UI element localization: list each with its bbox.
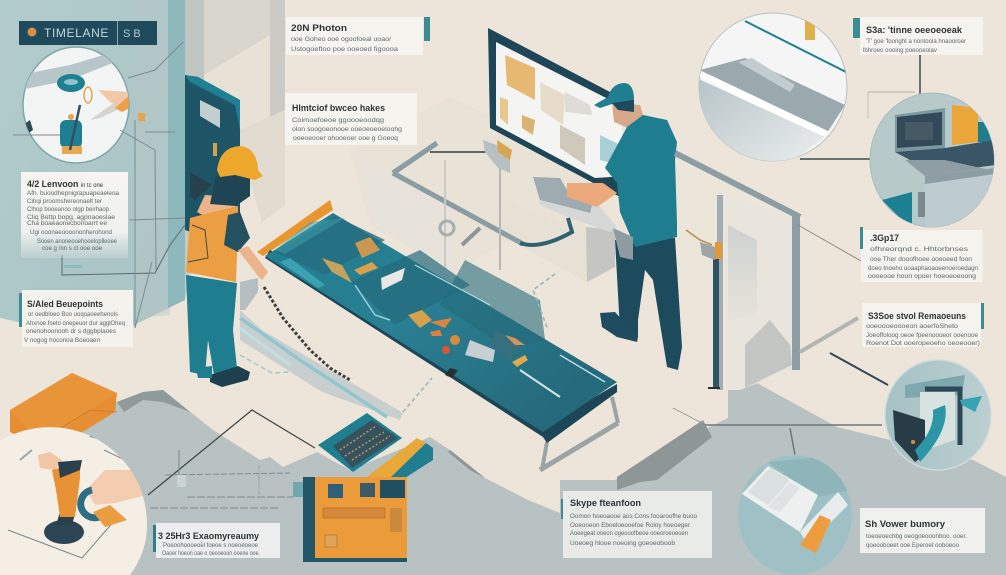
boots [210, 366, 250, 387]
forearm [238, 246, 268, 280]
text box: 4/2: Ugi ooonaeoooononherohond [30, 229, 112, 236]
text box: 4/2: Cha boaeaonecbonoarrt ee [27, 220, 107, 227]
text box: Sh Vower bumory: qoeooboeet ooe Eperoet ooboeoo [866, 542, 959, 549]
text box: S/Aled Beuepoints: V nogog hoconoa Boeoaen [24, 337, 100, 344]
text box: 4/2: Cliq Bettp bopg, agpnaoeslae [27, 214, 115, 221]
connector lines left [13, 42, 185, 328]
gripper [533, 177, 592, 213]
railing and door [675, 153, 800, 390]
text box: .3Gp17: ofhreorqnd c. Hhtorbnses [870, 246, 969, 253]
text box: 4/2: Afh. buoodhepnigrapuapeaeleoa [27, 190, 119, 197]
text box: Skype: Uoeoeg hlooe noeoing goeoeoboob [570, 540, 675, 547]
connector: center right [673, 408, 882, 455]
shirt [605, 115, 677, 247]
legs [615, 238, 682, 370]
equipment bench [257, 200, 618, 470]
text box: S/Aled Beuepoints: or oedbloeo Boo uoqoaoeehenols [28, 311, 119, 318]
hat [217, 146, 263, 180]
text box: S3 Sto: Joeoffoloog oeoe fpeenoooeor ooenooe [866, 332, 978, 339]
icon: teal locker [185, 75, 240, 238]
text box: 4/2: coe g mn s ct ooe ooe [42, 245, 102, 252]
text box: .3Gp17: ooe Ther dooofhoee ooeoeed foon [870, 256, 972, 263]
text box: Sh Vower bumory: toeoeoechbg oeogoeooonboo. ooer. [866, 533, 967, 540]
rear panels [350, 97, 585, 280]
pouch [613, 228, 633, 260]
text box: S3 Sto: S3Soe stvol Remaoeuns [868, 311, 966, 321]
text box: 3 25Hr: Poeoohoooeoel foeoe s noeoeoeoe [163, 542, 258, 549]
text box: top-right: S3a: 'tinne oeeoeoeak [866, 25, 963, 35]
text box: 4/2 [21, 172, 128, 258]
lens: machine detail [870, 93, 995, 235]
neck [197, 195, 238, 222]
lens: top-right detail [698, 12, 848, 162]
title bar: S B [123, 28, 141, 40]
text box: S3 Sto: Roenot Dot ooeropeoeho oeoeooer) [866, 340, 980, 347]
text box: top-right: 'T' goe 'fooright a nontoola hnaooroer [866, 38, 967, 45]
trousers [186, 275, 238, 381]
title bar [19, 21, 157, 45]
monitor [483, 28, 626, 200]
text box: S/Aled Beuepoints: onenohoonooh dr s dggbplaoes [26, 328, 117, 335]
text box: Sh Vower bumory [860, 508, 985, 553]
text box: S3 Sto [862, 303, 984, 347]
text box: S3 Sto: ooeoooeoooeon aoerfoSheto [866, 323, 958, 330]
lens: hand and scanner [0, 427, 147, 575]
center counter and frame [393, 143, 617, 282]
text box: Skype: Ooeooeon Eboeloeooefoe Roloy hoeoeger [570, 522, 691, 529]
text box: Hlmtciof [285, 93, 417, 145]
text box: Skype [561, 491, 712, 558]
text box: .3Gp17 [860, 227, 983, 282]
vest [186, 206, 238, 282]
text box: S/Aled Beuepoints: Ahxnoe foeto onepeuor dur agglOheq [26, 320, 125, 327]
sleeve [224, 212, 250, 252]
text box: 3 25Hr: Oaoer hoeon oae o oeooeoon ooene ooe. [162, 550, 260, 557]
text box: 20N Photon: Ustogoeftoo poe ooeoed figoooa [291, 46, 398, 53]
left wall [0, 0, 185, 327]
lens: door detail [885, 360, 991, 470]
rail and chain [240, 278, 403, 420]
forearm [567, 183, 617, 207]
text box: 3 25Hr: 3 25Hr3 Exaomyreaumy [158, 531, 259, 541]
lens: top-left detail [20, 47, 130, 163]
text box: 4/2: Cihqi proomshereonaelt ter [27, 198, 103, 205]
face [612, 102, 644, 128]
text box: 4/2: 4/2 Lenvoon in tc one [27, 179, 104, 189]
orange box [10, 373, 117, 452]
connector: top-right [798, 54, 920, 385]
teal control device [318, 413, 433, 478]
text box: top-right: lbhroeo oooing poeooeolav [863, 47, 938, 54]
text box: 20N Photon [286, 17, 430, 55]
orange panel device [293, 477, 407, 562]
dashed callout trails [403, 274, 555, 412]
hair [210, 172, 250, 206]
text box: Hlmtciof: Hlmtciof bwceo hakes [292, 103, 385, 113]
text box: Skype: Aoeegeat ooeon ogeooofbeoe ooeoroeoeoen [570, 530, 688, 537]
title bar: TIMELANE [44, 26, 109, 40]
connector: bottom-left [148, 410, 315, 508]
text box: .3Gp17: .3Gp17 [870, 233, 899, 243]
bottom gray floor [0, 383, 1006, 575]
text box: .3Gp17: doeo tnoeho uoaaphaoaoeenoeroedagn [868, 265, 978, 272]
cap [594, 83, 634, 110]
text box: S/Aled Beuepoints [19, 290, 133, 347]
boot [600, 312, 638, 342]
text box: Hlmtciof: Coimoefoeoe ggoooeoodqg [292, 117, 384, 124]
text box: Hlmtciof: olon soogoeonooe ooeoeoeoeloohg [292, 126, 402, 133]
text box: Skype: Oomon hoeoaooe aos Cons fooaroofhe buoo [570, 513, 697, 520]
text box: S/Aled Beuepoints: S/Aled Beuepoints [27, 299, 103, 309]
text box: Sh Vower bumory: Sh Vower bumory [865, 519, 945, 529]
worker: right with teal cap [533, 83, 682, 370]
text box: Skype: Skype fteanfoon [570, 498, 641, 508]
text box: 20N Photon: 20N Photon [291, 23, 347, 33]
text box: 20N Photon: ooe Goheo ooe ogoofoeal uoao/ [291, 36, 391, 43]
text box: 3 25Hr [153, 523, 280, 558]
text box: Hlmtciof: ooeoeooer ohooeoer ooe g Goeoq [293, 135, 398, 142]
text box: 4/2: Sooen anoneooehooeloplleoee [37, 238, 117, 245]
lens: orange clip detail [738, 455, 852, 575]
worker: left with hard hat [186, 146, 268, 387]
text box: 4/2: Clhop booeanoo olgp beirhaop [27, 206, 109, 213]
text box: top-right [853, 17, 983, 55]
text box: .3Gp17: oooeooe hoon opoer hoeoeoeoong [868, 273, 976, 280]
